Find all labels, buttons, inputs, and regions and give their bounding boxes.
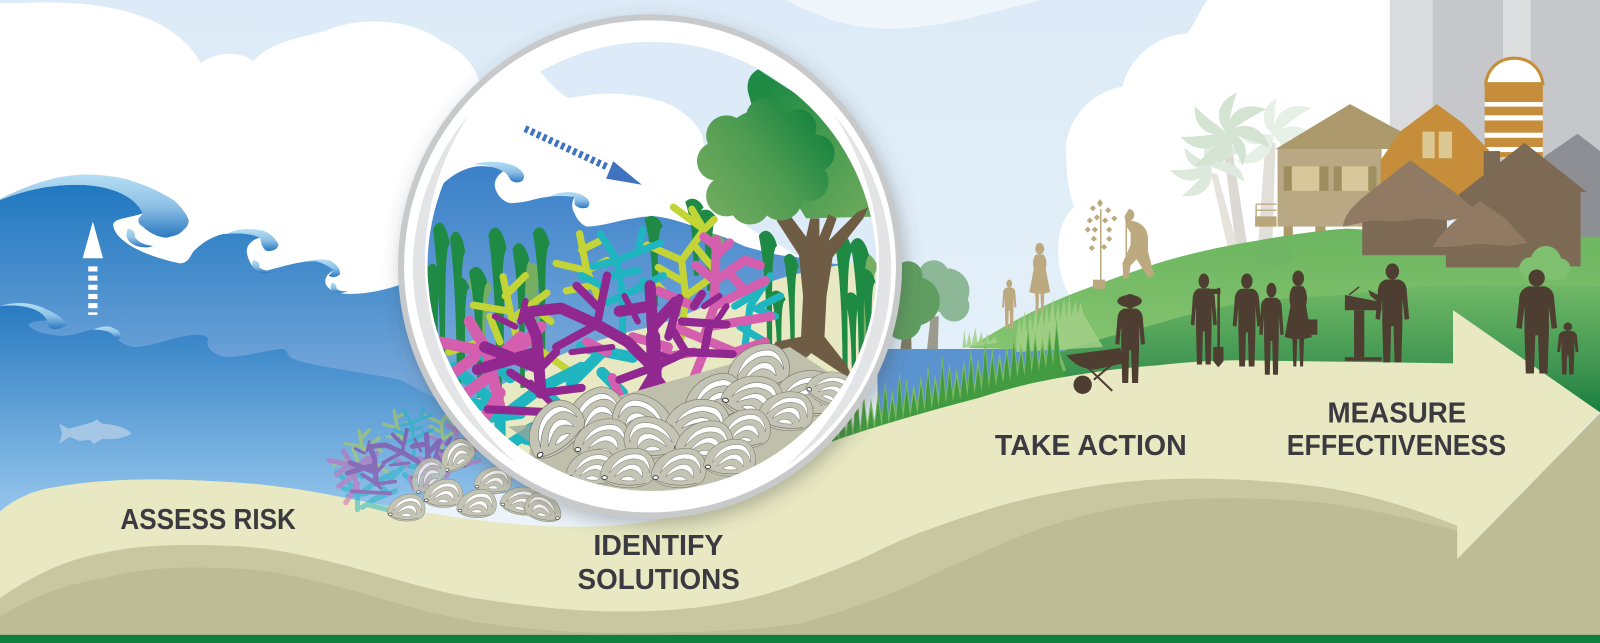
label: take action: TAKE ACTION — [995, 430, 1187, 462]
label: measure effectiveness: EFFECTIVENESS — [1287, 430, 1506, 462]
figure with shovel — [1191, 274, 1223, 367]
label: measure effectiveness: MEASURE — [1328, 398, 1466, 430]
brown house — [1459, 143, 1587, 266]
icon: fish — [59, 419, 132, 444]
lens cloud — [444, 72, 800, 258]
lens back grass — [468, 234, 878, 393]
green hill — [968, 229, 1600, 412]
thatched hut left — [1343, 160, 1472, 255]
label: identify solutions: SOLUTIONS — [578, 564, 740, 596]
label: identify solutions: IDENTIFY — [593, 530, 723, 562]
lens foam — [473, 162, 589, 208]
background grey towers — [1390, 0, 1600, 163]
lens dashed arrow — [525, 129, 642, 185]
small foam crests on front wave — [0, 303, 121, 339]
figure with wheelbarrow — [1066, 294, 1145, 394]
group of three — [1233, 270, 1317, 375]
label: identify solutions — [578, 530, 740, 596]
speaker — [1368, 263, 1409, 362]
label: measure effectiveness — [1287, 398, 1506, 462]
lens sky — [444, 42, 876, 454]
tan ground layer — [0, 413, 1600, 635]
grey house — [1531, 134, 1600, 239]
lens grass — [427, 199, 876, 408]
lens oysters — [529, 343, 848, 491]
lens wave — [423, 166, 878, 408]
magnifying lens frame — [401, 17, 899, 515]
lens sand — [473, 262, 876, 491]
darker tan layer — [0, 413, 1600, 635]
right trees behind the lens — [885, 260, 969, 383]
lens scene — [423, 36, 888, 500]
beige stilt house — [1255, 104, 1403, 239]
digging figure — [1122, 209, 1154, 280]
lens fan coral — [508, 424, 532, 442]
tan silhouettes planting — [1002, 199, 1154, 329]
lens tree trunk — [769, 207, 868, 380]
wetland grass on hill — [962, 294, 1103, 352]
lens coral back — [439, 207, 781, 449]
orange barn — [1381, 104, 1489, 219]
lens highlights — [413, 114, 891, 465]
wave foam crests — [0, 175, 348, 293]
pale path arrow — [0, 310, 1600, 643]
podium — [1345, 287, 1382, 361]
palm trees — [1170, 89, 1322, 247]
bushes on hill — [1255, 239, 1570, 280]
cloud: top centre — [786, 0, 1041, 29]
wetland grass along path — [832, 318, 1066, 454]
sapling in pot — [1085, 199, 1117, 289]
footer green bar — [0, 635, 1600, 643]
thatched hut right — [1433, 201, 1528, 267]
darker green hill layer — [1045, 285, 1600, 412]
oysters outside lens — [387, 434, 566, 526]
up arrow: rising sea level — [83, 221, 103, 315]
faded coral outside lens — [329, 398, 487, 510]
cloud: right — [1058, 0, 1398, 306]
lens tree back canopy — [748, 69, 871, 218]
silo — [1485, 58, 1543, 157]
dark silhouettes — [1066, 263, 1579, 394]
adult and child — [1516, 269, 1579, 375]
label: assess risk: ASSESS RISK — [120, 504, 296, 536]
ocean back wave — [0, 185, 531, 531]
ocean front wave — [0, 306, 531, 531]
lens tree front canopy — [697, 98, 835, 225]
water right — [878, 349, 1065, 429]
cloud: left — [0, 2, 531, 316]
